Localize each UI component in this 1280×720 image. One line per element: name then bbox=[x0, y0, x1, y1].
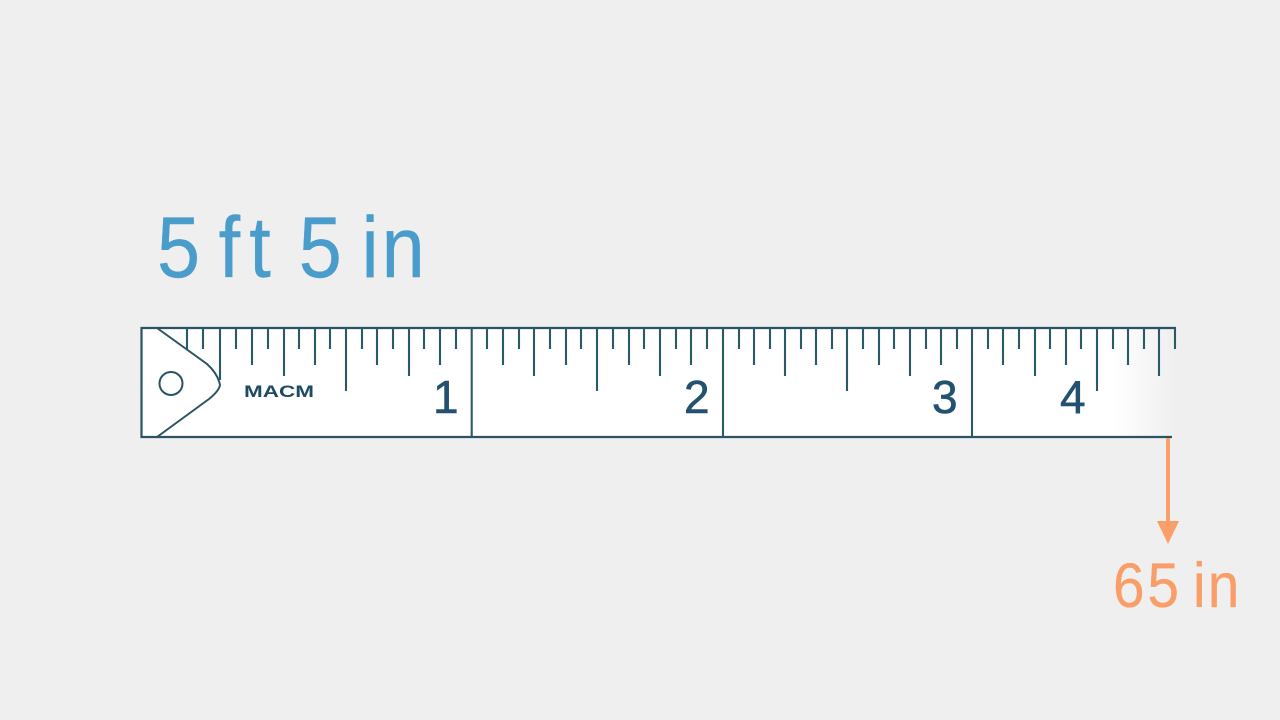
inch numerals: 2 bbox=[684, 371, 710, 423]
arrow: down to 65 in bbox=[1157, 438, 1179, 544]
tape measure bbox=[141, 328, 1176, 437]
tape end hook bbox=[157, 328, 220, 437]
tape body bbox=[141, 328, 1175, 437]
tape outline bbox=[142, 328, 1176, 437]
inch numerals: 1 bbox=[433, 371, 459, 423]
inch numerals: 4 bbox=[1060, 371, 1086, 423]
tick marks bbox=[187, 328, 1175, 437]
inch numerals bbox=[433, 371, 1086, 423]
label: 65 in: 65 in bbox=[1113, 550, 1239, 621]
brand label: MACM bbox=[244, 382, 314, 401]
heading: 5 ft 5 in: 5 ft 5 in bbox=[157, 200, 425, 296]
inch numerals: 3 bbox=[932, 371, 958, 423]
